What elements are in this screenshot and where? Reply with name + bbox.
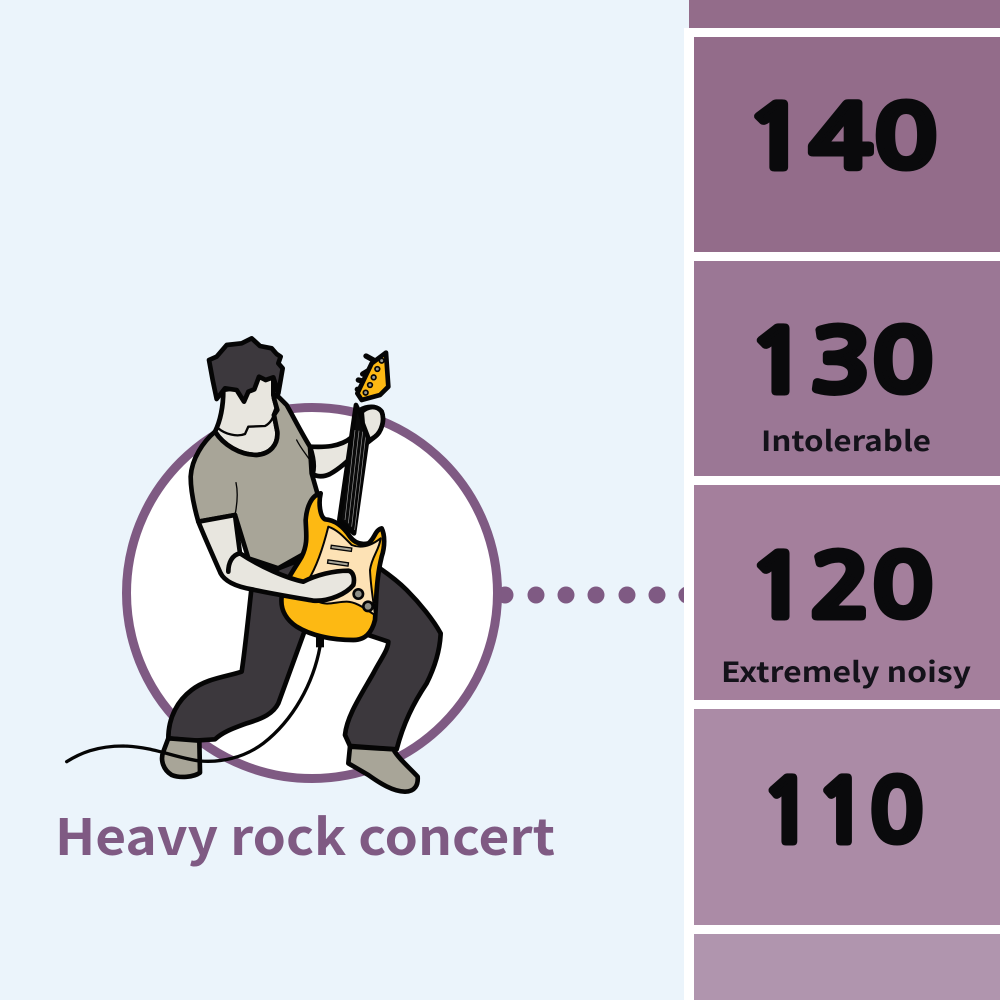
decibel scale column	[689, 0, 1000, 1000]
strumming arm	[221, 553, 354, 601]
dotted connector	[496, 586, 684, 604]
knobs	[354, 589, 373, 611]
hair	[209, 338, 283, 402]
scale band: 140	[694, 37, 1000, 252]
scale band: 140: 140	[744, 95, 938, 181]
scale band: 120 Extremely noisy: Extremely noisy	[721, 651, 971, 691]
left shoe	[162, 738, 200, 777]
icon circle	[126, 408, 498, 778]
sleeve crease	[235, 440, 312, 515]
right shoe	[348, 747, 418, 792]
illustration: rock guitarist	[67, 338, 441, 792]
upper arm	[198, 515, 240, 577]
headstock	[357, 353, 388, 400]
scale band: 120 Extremely noisy: 120	[747, 544, 934, 630]
guitar jack	[316, 637, 324, 647]
neck and face	[215, 375, 277, 455]
scale band: 110: 110	[760, 769, 924, 855]
scale band: 110	[694, 709, 1000, 925]
pickguard	[308, 527, 381, 615]
scale band: 120 Extremely noisy	[694, 485, 1000, 700]
caption: Heavy rock concert	[55, 798, 555, 870]
scale band: 130 Intolerable: 130	[747, 319, 934, 405]
forearm, raised	[310, 407, 383, 476]
scale band: bottom strip	[694, 934, 1000, 1000]
guitar strings	[345, 430, 366, 530]
t-shirt	[191, 395, 318, 568]
scale band: 130 Intolerable	[694, 261, 1000, 476]
guitar neck	[339, 405, 368, 533]
fretting hand	[362, 407, 383, 441]
pickups	[328, 545, 352, 566]
collar line	[218, 413, 274, 435]
trousers	[168, 560, 441, 749]
scale band: top strip	[689, 0, 1000, 28]
scale band: 130 Intolerable: Intolerable	[761, 420, 931, 460]
guitar body	[281, 493, 384, 640]
cable	[67, 647, 320, 762]
